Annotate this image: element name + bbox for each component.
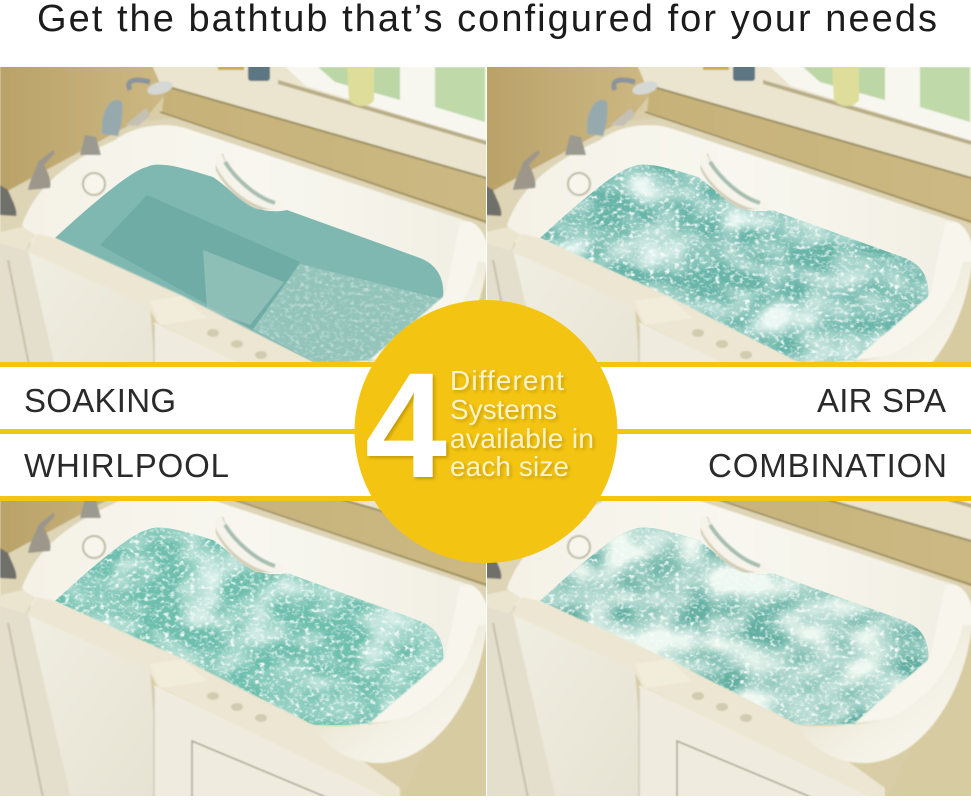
water: still soaking water <box>55 164 444 362</box>
badge text: each size <box>450 451 569 482</box>
badge text: available in <box>450 423 594 454</box>
badge: 4 different systems <box>354 300 618 563</box>
label: soaking: SOAKING <box>24 382 176 419</box>
label: air spa: AIR SPA <box>817 382 946 419</box>
panel: soaking tub photo <box>0 67 486 362</box>
water: air spa bubbles <box>540 164 928 362</box>
label bands <box>0 362 971 501</box>
panel: air spa tub photo <box>487 67 971 362</box>
label: combination: COMBINATION <box>708 447 947 484</box>
label: whirlpool: WHIRLPOOL <box>24 447 229 484</box>
badge text: Different <box>450 365 564 396</box>
badge numeral: 4 <box>365 341 447 509</box>
panel: whirlpool tub photo <box>0 501 486 796</box>
badge text: Systems <box>450 394 557 425</box>
badge text <box>450 365 594 482</box>
panel: combination tub photo <box>487 501 971 796</box>
water: whirlpool jets <box>55 528 444 725</box>
water: combination foam <box>540 528 928 725</box>
